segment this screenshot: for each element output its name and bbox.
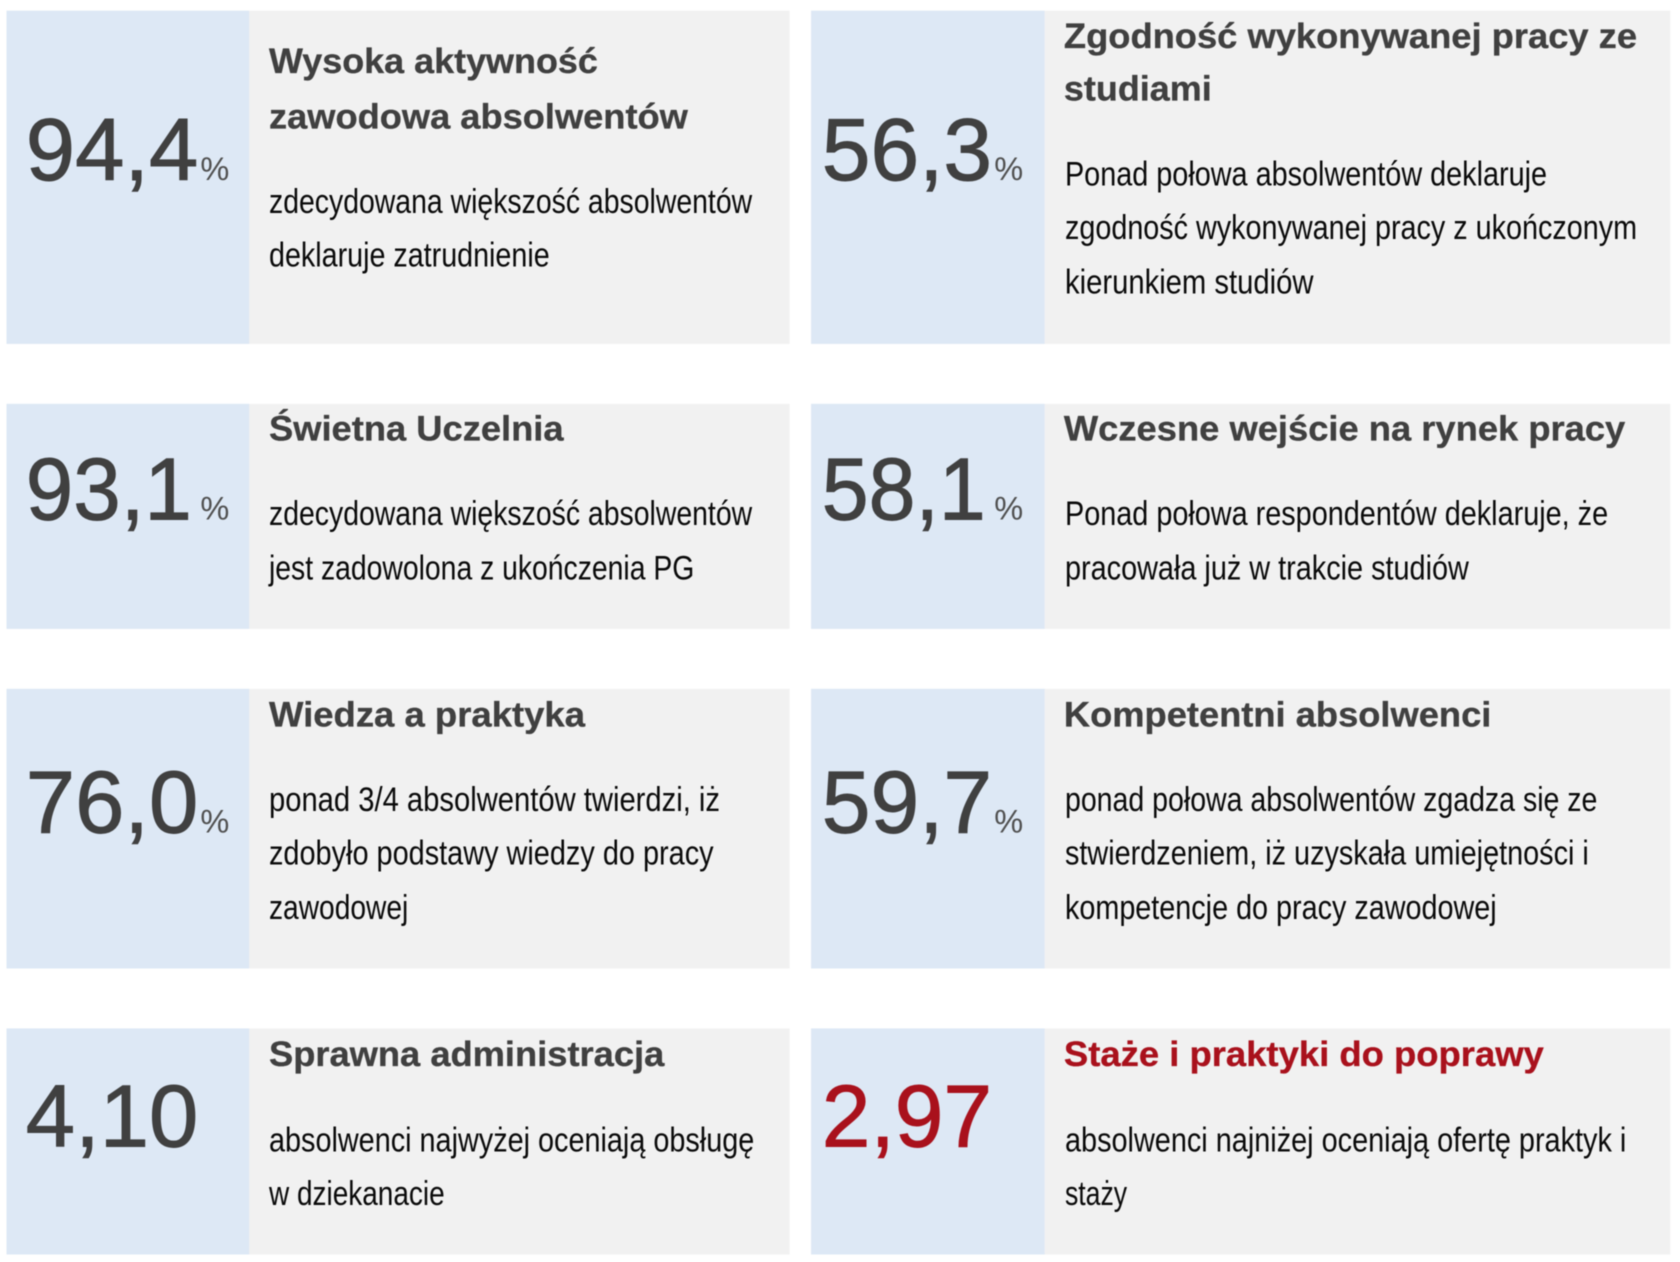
description <box>269 183 752 275</box>
heading: Sprawna administracja <box>269 1035 665 1074</box>
heading: Wczesne wejście na rynek pracy <box>1064 409 1626 448</box>
stat: 94,4%: 94,4 <box>26 100 198 199</box>
description <box>268 1122 754 1213</box>
description: w dziekanacie <box>268 1175 445 1213</box>
description <box>1065 781 1597 927</box>
description <box>1065 155 1637 302</box>
panel: Kompetentni absolwenci <box>811 689 1670 968</box>
description: pracowała już w trakcie studiów <box>1065 550 1469 588</box>
description: zdecydowana większość absolwentów <box>269 495 752 533</box>
heading: Wysoka aktywność <box>269 42 598 81</box>
heading: Kompetentni absolwenci <box>1064 695 1491 734</box>
stat: 76,0%: % <box>200 803 229 839</box>
panel: Wiedza a praktyka <box>7 689 790 968</box>
description: zdecydowana większość absolwentów <box>269 183 752 221</box>
panel: Staże i praktyki do poprawy <box>811 1028 1670 1255</box>
stat: 56,3%: 56,3 <box>822 100 992 199</box>
heading <box>269 42 688 137</box>
description <box>1065 495 1608 588</box>
heading: zawodowa absolwentów <box>269 98 688 137</box>
description: absolwenci najwyżej oceniają obsługę <box>269 1122 754 1160</box>
heading <box>1064 17 1637 109</box>
stat: 76,0%: 76,0 <box>26 752 198 851</box>
heading: Świetna Uczelnia <box>269 408 564 448</box>
stat: 56,3%: % <box>994 151 1023 187</box>
description <box>268 495 752 588</box>
description: zdobyło podstawy wiedzy do pracy <box>269 835 714 873</box>
description: ponad 3/4 absolwentów twierdzi, iż <box>269 781 720 819</box>
panel: Wczesne wejście na rynek pracy <box>811 404 1670 629</box>
stat: 93,1%: % <box>200 491 229 527</box>
description: deklaruje zatrudnienie <box>269 237 550 275</box>
heading: Wiedza a praktyka <box>269 695 585 734</box>
description: zawodowej <box>269 889 408 927</box>
heading: Staże i praktyki do poprawy <box>1064 1035 1544 1074</box>
stat: 59,7%: 59,7 <box>822 752 992 851</box>
description <box>1065 1122 1626 1213</box>
heading: studiami <box>1064 70 1212 109</box>
stat: 2,97: 2,97 <box>822 1066 992 1165</box>
stat: 59,7%: % <box>994 803 1023 839</box>
description: stwierdzeniem, iż uzyskała umiejętności i <box>1065 835 1589 873</box>
description <box>269 781 720 927</box>
panel: Wysoka aktywność zawodowa <box>7 11 790 344</box>
description: kierunkiem studiów <box>1065 264 1314 302</box>
stat: 58,1%: % <box>994 491 1023 527</box>
description: Ponad połowa absolwentów deklaruje <box>1065 155 1547 193</box>
stat: 94,4%: % <box>200 151 229 187</box>
panel: Sprawna administracja <box>7 1028 790 1255</box>
description: jest zadowolona z ukończenia PG <box>268 550 694 588</box>
stat: 4,10: 4,10 <box>26 1066 198 1165</box>
heading: Zgodność wykonywanej pracy ze <box>1064 17 1637 56</box>
stat: 58,1%: 58,1 <box>822 440 986 539</box>
panel: Zgodność wykonywanej pracy <box>811 11 1670 344</box>
description: kompetencje do pracy zawodowej <box>1065 889 1497 927</box>
description: staży <box>1065 1175 1128 1213</box>
panel: Świetna Uczelnia <box>7 404 790 629</box>
stat: 93,1%: 93,1 <box>26 440 192 539</box>
